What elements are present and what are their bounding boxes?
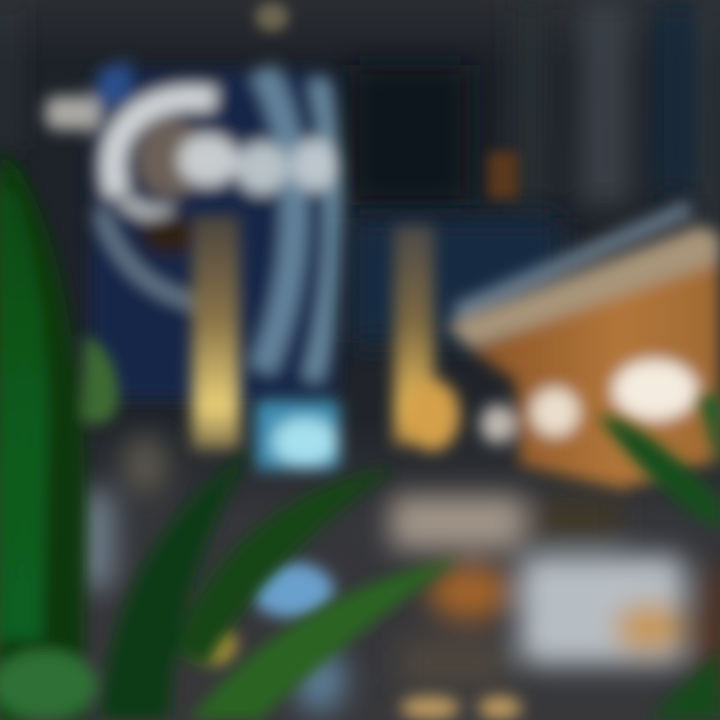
light column: left pillar (192, 215, 240, 450)
lounge: tables, seating and lights (75, 435, 720, 714)
plant: left edge base (0, 170, 20, 720)
lounge highlights (193, 562, 522, 720)
columns: dark upper right pillars (0, 0, 720, 260)
logo: white ring (45, 96, 339, 255)
ceiling lamp (255, 2, 289, 32)
plant: right foreground leaves (598, 392, 720, 720)
background: dark doorway (350, 65, 470, 205)
panel: blue wall sign (45, 60, 339, 400)
light column: right pillar (394, 225, 460, 451)
canopy: wooden roof with pale edge (445, 208, 720, 490)
dark blue mid panel (350, 218, 560, 343)
orange wall accent (488, 152, 518, 200)
plant: left foreground leaves (0, 150, 460, 720)
cyan light box (255, 400, 340, 470)
